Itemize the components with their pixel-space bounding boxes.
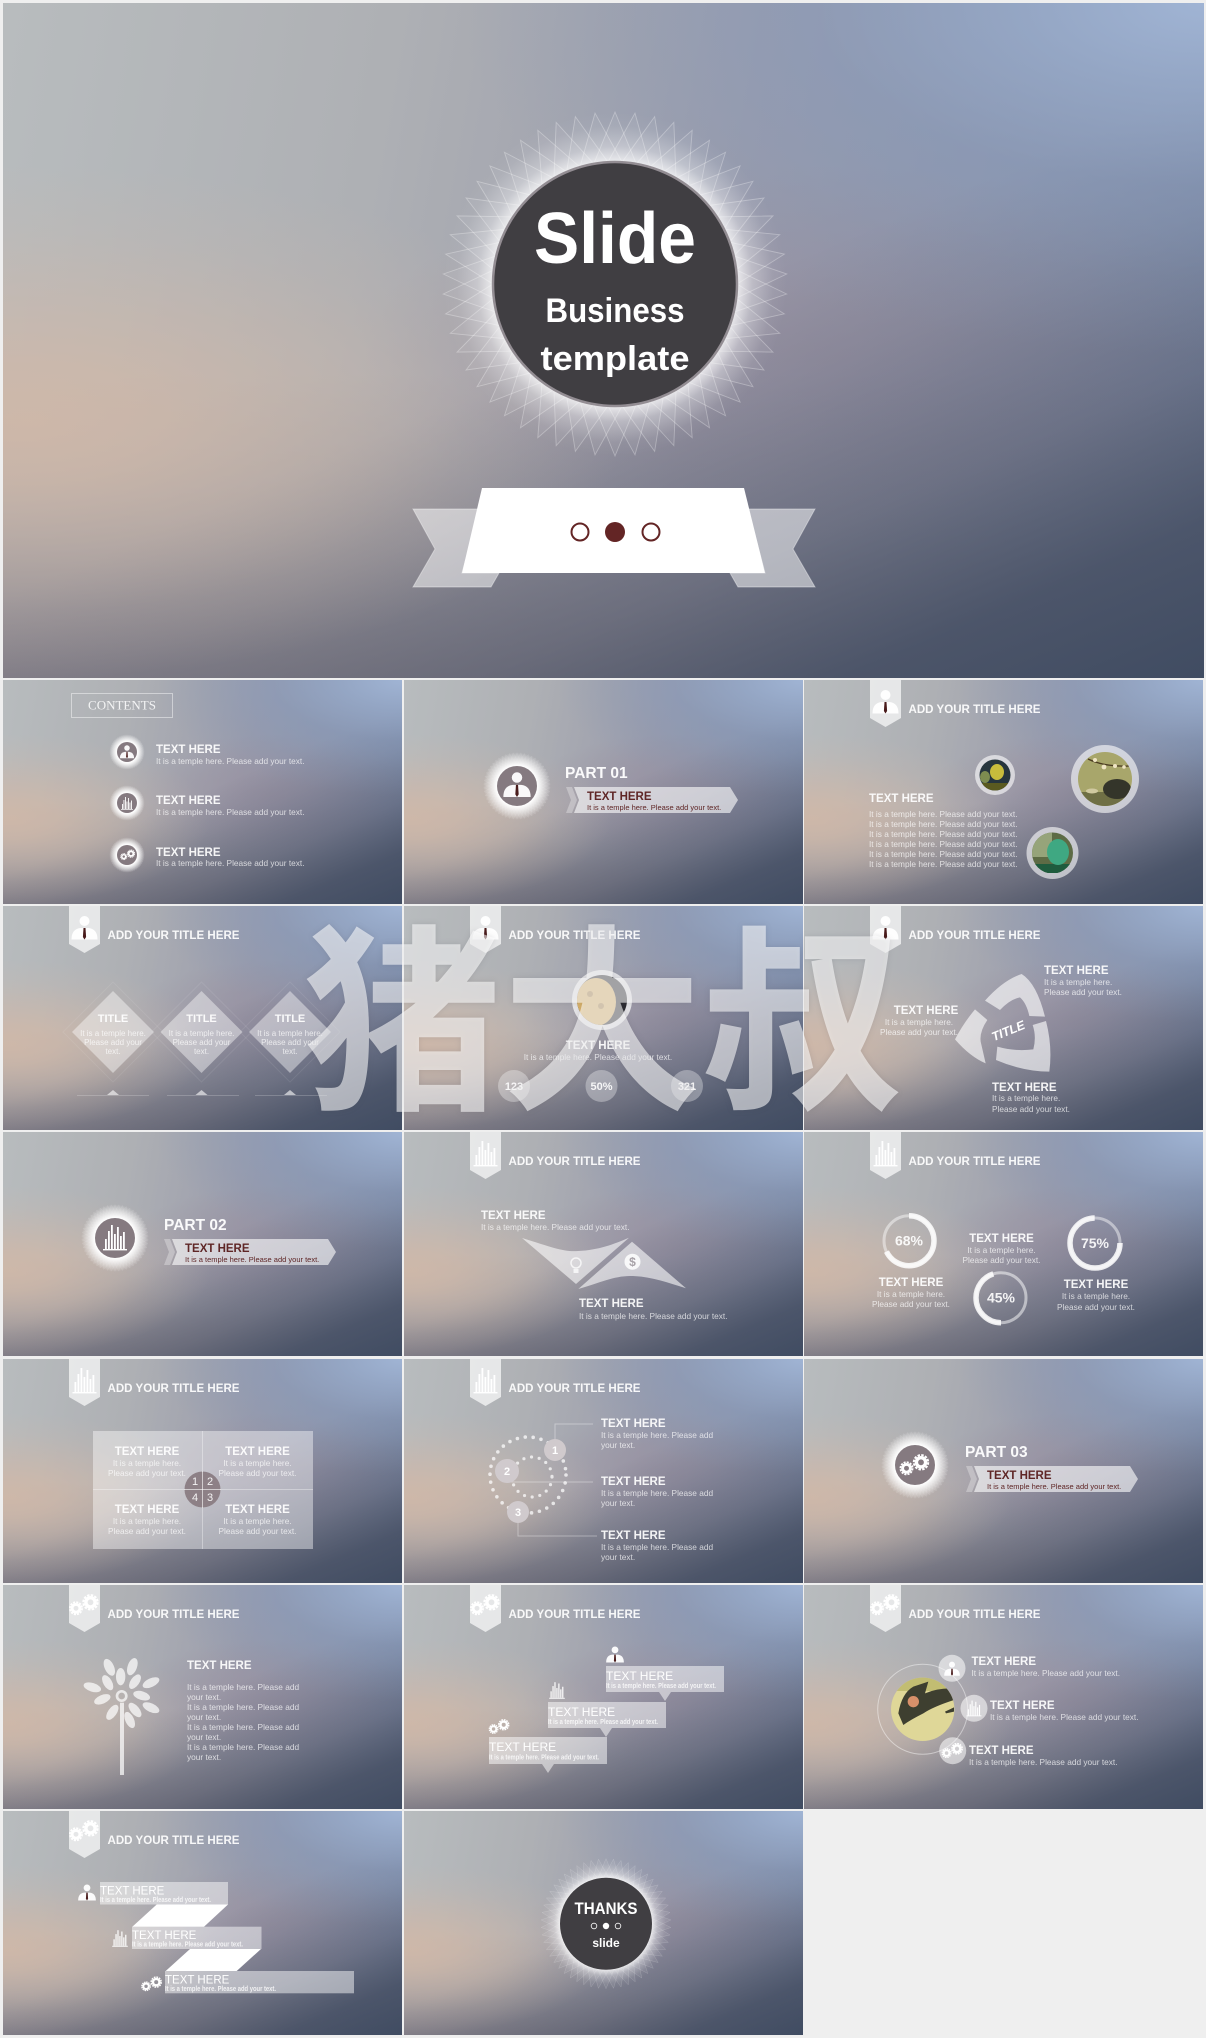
panel: photo circles slide	[804, 680, 1203, 904]
map photo circle	[572, 970, 632, 1030]
contents item 2: TEXT HERE	[156, 795, 221, 807]
part 01 badge	[474, 742, 560, 828]
text block 1: It is a temple here.	[877, 1289, 945, 1299]
quadrant box: TEXT HERE	[115, 1504, 180, 1516]
step box 3: TEXT HERE	[489, 1740, 556, 1754]
stat 123: 123	[505, 1081, 523, 1093]
text block top: TEXT HERE	[481, 1210, 546, 1222]
number 3: 3	[515, 1507, 521, 1519]
panel: part 03 slide	[804, 1359, 1203, 1583]
text block 2: TEXT HERE	[601, 1476, 666, 1488]
diamond 1	[63, 982, 163, 1096]
part 03 banner	[966, 1466, 1138, 1492]
quadrant box: It is a temple here.	[223, 1458, 292, 1468]
step box 1: It is a temple here. Please add your text.	[606, 1683, 716, 1690]
part 03 badge	[872, 1421, 958, 1507]
step box 3	[489, 1737, 607, 1773]
panel: percentage rings slide	[804, 1132, 1203, 1356]
number 1	[544, 1439, 566, 1461]
text block: It is a temple here. Please add	[187, 1702, 299, 1712]
diamond 3	[240, 982, 340, 1096]
center numbered circle: 1	[192, 1476, 198, 1488]
slide header: ADD YOUR TITLE HERE	[508, 1383, 641, 1395]
slide header	[69, 1811, 240, 1858]
slide header: ADD YOUR TITLE HERE	[108, 1383, 240, 1395]
step box 3: It is a temple here. Please add your text.	[489, 1754, 599, 1762]
text block: It is a temple here. Please add	[187, 1682, 299, 1692]
text block: It is a temple here. Please add your text.	[869, 829, 1018, 839]
text block 3: It is a temple here.	[1062, 1291, 1130, 1301]
stat 321: 321	[678, 1081, 696, 1093]
subtitle: template: template	[540, 340, 690, 378]
center numbered circle: 3	[207, 1492, 213, 1504]
panel: zigzag slide	[3, 1811, 402, 2035]
center text: It is a temple here. Please add your text.	[524, 1052, 672, 1062]
slide header: ADD YOUR TITLE HERE	[908, 930, 1041, 942]
contents item 1: It is a temple here. Please add your text.	[156, 756, 305, 766]
text block 1: your text.	[601, 1440, 635, 1450]
step box 1: TEXT HERE	[606, 1669, 673, 1683]
quadrant box: TEXT HERE	[225, 1446, 290, 1458]
text block bottom	[579, 1298, 728, 1321]
text block	[869, 793, 1018, 869]
text block 1: It is a temple here. Please add	[601, 1430, 713, 1440]
icon: person	[78, 1884, 96, 1900]
text block: It is a temple here. Please add your text.	[869, 809, 1018, 819]
title in cycle: TITLE	[990, 1018, 1028, 1044]
white zigzag connectors	[132, 1904, 261, 1971]
bar 1: TEXT HERE	[100, 1886, 165, 1898]
slide label: slide	[592, 1936, 620, 1950]
text block: It is a temple here. Please add	[187, 1722, 299, 1732]
diamond 2: Please add your	[173, 1038, 231, 1047]
quadrant box: It is a temple here.	[113, 1458, 181, 1468]
text block bottom: It is a temple here.	[992, 1093, 1060, 1103]
text block 1	[872, 1277, 950, 1309]
quadrant box: Please add your text.	[108, 1526, 186, 1536]
text block 3: TEXT HERE	[601, 1530, 666, 1542]
quadrant box: Please add your text.	[219, 1526, 296, 1536]
contents item 3	[104, 832, 305, 877]
text block 2: It is a temple here.	[967, 1245, 1036, 1255]
text block: your text.	[187, 1692, 221, 1702]
part 02 badge	[72, 1194, 158, 1280]
center text: TEXT HERE	[566, 1040, 631, 1052]
ring 68%: 68%	[895, 1232, 924, 1248]
contents item 3: It is a temple here. Please add your text.	[156, 858, 305, 868]
text block 1: Please add your text.	[872, 1299, 950, 1309]
slide header	[870, 906, 1041, 953]
text block bottom: TEXT HERE	[579, 1298, 644, 1310]
node 3	[939, 1737, 1118, 1767]
bar 2: TEXT HERE	[132, 1930, 197, 1942]
slide header	[69, 1359, 240, 1406]
text block: TEXT HERE	[869, 793, 934, 805]
text block right: Please add your text.	[1044, 987, 1122, 997]
step box 2: It is a temple here. Please add your text.	[548, 1719, 658, 1726]
subtitle: Business: Business	[546, 292, 684, 330]
slide header	[870, 1585, 1041, 1632]
node 2: TEXT HERE	[990, 1700, 1055, 1712]
folded shape right with dollar icon	[578, 1242, 686, 1289]
slide header: ADD YOUR TITLE HERE	[508, 1609, 641, 1621]
diamond 3: It is a temple here.	[257, 1029, 323, 1038]
node 2	[960, 1695, 1139, 1722]
slide header	[470, 1585, 641, 1632]
orbit and photo	[878, 1664, 968, 1754]
slide header	[69, 906, 240, 953]
ring 75%	[1070, 1218, 1120, 1268]
node 3: TEXT HERE	[969, 1745, 1034, 1757]
quadrant box: Please add your text.	[219, 1468, 296, 1478]
text block 2: It is a temple here. Please add	[601, 1488, 713, 1498]
center numbered circle	[184, 1471, 221, 1508]
text block top	[481, 1210, 630, 1232]
bar 3: TEXT HERE	[165, 1974, 230, 1986]
step box 2	[548, 1702, 666, 1737]
text block 1: TEXT HERE	[879, 1277, 944, 1289]
text block top: It is a temple here. Please add your text.	[481, 1222, 630, 1232]
text block bottom: TEXT HERE	[992, 1082, 1057, 1094]
bar 2	[132, 1927, 262, 1949]
panel: folded shape slide	[404, 1132, 803, 1356]
part 03 banner: TEXT HERE	[987, 1470, 1052, 1482]
icon: gears	[142, 1977, 161, 1991]
text block left: It is a temple here.	[885, 1017, 953, 1027]
icon: bars	[549, 1682, 565, 1699]
text block 3: TEXT HERE	[1064, 1279, 1129, 1291]
contents label	[72, 694, 172, 718]
text block left: Please add your text.	[880, 1027, 958, 1037]
diamond 2	[152, 982, 252, 1096]
slide header	[470, 906, 641, 953]
text block 3: your text.	[601, 1552, 635, 1562]
panel: contents slide	[3, 680, 402, 904]
ring 45%: 45%	[987, 1290, 1016, 1306]
bar 3: It is a temple here. Please add your text.	[165, 1986, 276, 1993]
text block: TEXT HERE	[187, 1660, 252, 1672]
dotted rings and leader lines	[490, 1424, 597, 1536]
part 01 banner: It is a temple here. Please add your text.	[587, 803, 721, 812]
text block 2	[963, 1233, 1040, 1265]
contents item 3: TEXT HERE	[156, 847, 221, 859]
quadrant box: It is a temple here.	[113, 1516, 181, 1526]
panel: cover slide	[3, 3, 1204, 678]
slide header	[870, 1132, 1041, 1179]
text block: It is a temple here. Please add your text.	[869, 859, 1018, 869]
part 01 heading: PART 01	[565, 765, 628, 782]
step box 2: TEXT HERE	[548, 1705, 615, 1719]
text block 3: It is a temple here. Please add	[601, 1542, 713, 1552]
title: Slide: Slide	[534, 199, 696, 279]
panel: three diamonds slide	[3, 906, 402, 1130]
text block: It is a temple here. Please add your text.	[869, 849, 1018, 859]
slide header	[69, 1585, 240, 1632]
slide header: ADD YOUR TITLE HERE	[908, 1609, 1041, 1621]
slide header: ADD YOUR TITLE HERE	[508, 1156, 641, 1168]
slide header: ADD YOUR TITLE HERE	[108, 1609, 240, 1621]
part 01 banner: TEXT HERE	[587, 791, 652, 803]
text block right: TEXT HERE	[1044, 965, 1109, 977]
contents item 2: It is a temple here. Please add your text.	[156, 807, 305, 817]
stat 321	[671, 1070, 703, 1102]
part 02 banner: TEXT HERE	[185, 1243, 250, 1255]
part 01 banner	[566, 787, 738, 813]
text block left	[880, 1005, 959, 1037]
panel: part 01 slide	[404, 680, 803, 904]
quadrant box: It is a temple here.	[223, 1516, 292, 1526]
folded shape left with bulb icon	[522, 1238, 629, 1284]
node 1	[938, 1655, 1120, 1682]
text block: It is a temple here. Please add	[187, 1742, 299, 1752]
bar 3	[165, 1971, 354, 1993]
ring 45%	[976, 1273, 1026, 1323]
panel: three arrows slide	[804, 906, 1203, 1130]
part 03 heading: PART 03	[965, 1444, 1028, 1461]
slide header: ADD YOUR TITLE HERE	[908, 704, 1041, 716]
number 2: 2	[504, 1466, 510, 1478]
node 2: It is a temple here. Please add your text.	[990, 1712, 1139, 1722]
panel: pinwheel slide	[3, 1585, 402, 1809]
center numbered circle: 2	[207, 1476, 213, 1488]
watermark: 猪大叔	[302, 914, 902, 1137]
diamond 1: Please add your	[84, 1038, 142, 1047]
bar 2: It is a temple here. Please add your text.	[132, 1942, 243, 1948]
text block 2: TEXT HERE	[969, 1233, 1034, 1245]
diamond 1: TITLE	[98, 1013, 128, 1025]
contents item 1	[104, 729, 305, 774]
text block right	[1044, 965, 1122, 997]
thanks badge	[522, 1839, 689, 2005]
part 02 banner	[164, 1239, 336, 1265]
text block bottom: It is a temple here. Please add your text.	[579, 1311, 728, 1321]
diamond 3: TITLE	[275, 1013, 305, 1025]
stat 50%: 50%	[590, 1081, 613, 1093]
cycle arrows	[955, 974, 1050, 1072]
slide header: ADD YOUR TITLE HERE	[108, 1835, 240, 1847]
text block 2	[601, 1476, 713, 1508]
diamond 3: text.	[282, 1047, 298, 1056]
panel: part 02 slide	[3, 1132, 402, 1356]
thanks heading: THANKS	[574, 1899, 638, 1918]
node 3: It is a temple here. Please add your text.	[969, 1757, 1118, 1767]
panel: map photo and stats slide	[404, 906, 803, 1130]
center numbered circle: 4	[192, 1492, 198, 1504]
text block 1	[601, 1418, 713, 1450]
quadrant box	[93, 1431, 313, 1549]
panel: dotted cycle slide	[404, 1359, 803, 1583]
bar 1: It is a temple here. Please add your text.	[100, 1897, 211, 1904]
step box 1	[606, 1666, 724, 1701]
slide header: ADD YOUR TITLE HERE	[908, 1156, 1041, 1168]
part 02 heading: PART 02	[164, 1217, 227, 1234]
text block: your text.	[187, 1712, 221, 1722]
slide header	[470, 1132, 641, 1179]
pinwheel tree	[82, 1657, 161, 1775]
node 1: TEXT HERE	[972, 1656, 1036, 1668]
slide header	[870, 680, 1041, 727]
node 1: It is a temple here. Please add your text.	[972, 1668, 1120, 1678]
diamond 2: It is a temple here.	[169, 1029, 234, 1038]
text block: your text.	[187, 1752, 221, 1762]
center text	[524, 1040, 672, 1062]
folded shape right with dollar icon: $	[629, 1255, 636, 1269]
text block bottom: Please add your text.	[992, 1104, 1070, 1114]
ring 68%	[884, 1216, 934, 1266]
number 1: 1	[552, 1445, 558, 1457]
text block: your text.	[187, 1732, 221, 1742]
icon: person	[606, 1646, 624, 1662]
text block right: It is a temple here.	[1044, 977, 1112, 987]
number 2	[495, 1459, 519, 1483]
number 3	[507, 1501, 529, 1523]
bar 1	[100, 1882, 228, 1904]
text block	[187, 1660, 299, 1762]
contents label: CONTENTS	[88, 698, 156, 712]
ribbon with three dots	[413, 488, 815, 587]
quadrant box: Please add your text.	[108, 1468, 186, 1478]
quadrant box: TEXT HERE	[115, 1446, 180, 1458]
text block 2: Please add your text.	[963, 1255, 1040, 1265]
ring 75%: 75%	[1081, 1235, 1110, 1251]
panel: thanks slide	[404, 1811, 803, 2035]
cover starburst badge	[392, 59, 834, 499]
stat 50%	[586, 1070, 618, 1102]
text block left: TEXT HERE	[894, 1005, 959, 1017]
text block 2: your text.	[601, 1498, 635, 1508]
text block 3	[1057, 1279, 1135, 1312]
panel: speech box steps slide	[404, 1585, 803, 1809]
panel: quadrant slide	[3, 1359, 402, 1583]
slide header	[470, 1359, 641, 1406]
text block: It is a temple here. Please add your text.	[869, 819, 1018, 829]
text block bottom	[992, 1082, 1070, 1114]
diamond 1: It is a temple here.	[80, 1029, 146, 1038]
diamond 2: text.	[194, 1047, 209, 1056]
part 03 banner: It is a temple here. Please add your text.	[987, 1482, 1121, 1491]
contents item 1: TEXT HERE	[156, 744, 221, 756]
photo circle large	[1071, 745, 1139, 813]
slide header: ADD YOUR TITLE HERE	[508, 930, 641, 942]
quadrant box: TEXT HERE	[225, 1504, 290, 1516]
contents item 2	[104, 780, 305, 825]
slide header: ADD YOUR TITLE HERE	[108, 930, 240, 942]
icon: gears	[489, 1720, 509, 1733]
panel: photo with three nodes slide	[804, 1585, 1203, 1809]
part 02 banner: It is a temple here. Please add your text.	[185, 1255, 319, 1264]
text block 3: Please add your text.	[1057, 1302, 1135, 1312]
photo circle green	[1026, 827, 1078, 879]
photo circle small	[975, 755, 1015, 795]
diamond 2: TITLE	[186, 1013, 217, 1025]
three dots	[591, 1923, 621, 1929]
diamond 1: text.	[105, 1047, 121, 1056]
text block: It is a temple here. Please add your text.	[869, 839, 1018, 849]
stat 123	[498, 1070, 530, 1102]
diamond 3: Please add your	[261, 1038, 319, 1047]
text block 3	[601, 1530, 713, 1562]
text block 1: TEXT HERE	[601, 1418, 666, 1430]
icon: bars	[112, 1930, 128, 1947]
